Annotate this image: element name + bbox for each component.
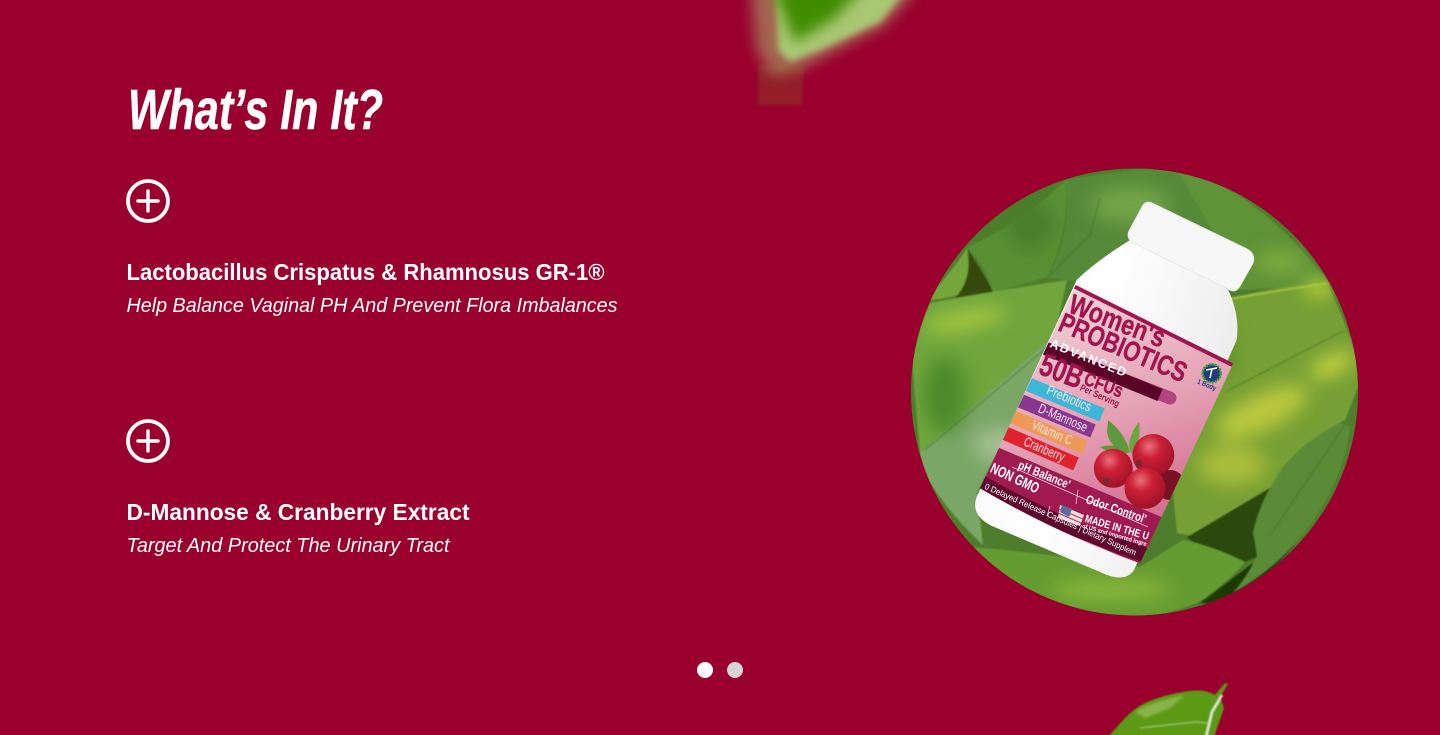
item 2: D-Mannose xyxy=(126,421,470,557)
label: Prebiotics xyxy=(1045,382,1094,415)
decorative leaf: bottom xyxy=(1108,683,1228,735)
lower magenta band xyxy=(980,448,1162,564)
claims: of US and imported ingre xyxy=(1081,524,1148,548)
leaf veins xyxy=(925,198,1345,535)
CFU count: 50B xyxy=(1035,346,1089,396)
item 1 heading: Lactobacillus Crispatus & Rhamnosus GR-1® xyxy=(126,259,605,285)
bottle body xyxy=(975,230,1237,578)
item 2 heading: D-Mannose & Cranberry Extract xyxy=(126,499,470,525)
claims: MADE IN THE U xyxy=(1083,513,1150,543)
advanced bar: ADVANCED xyxy=(1048,336,1128,380)
bottle cap xyxy=(1128,202,1254,291)
label: D-Mannose xyxy=(1036,401,1090,435)
icon: plus circle 1 xyxy=(128,181,168,221)
brand lines: PROBIOTICS xyxy=(1054,307,1192,388)
carousel dots xyxy=(697,662,743,678)
CFU count xyxy=(1039,353,1122,408)
logo: 1 Body xyxy=(1196,364,1221,393)
claims: Odor Control' xyxy=(1084,492,1148,526)
logo: 1 Body: 1 Body xyxy=(1196,379,1217,393)
leaves background xyxy=(905,165,1365,621)
bottle xyxy=(975,202,1254,578)
label: Cranberry xyxy=(1022,434,1067,465)
brand lines xyxy=(1058,294,1188,381)
item 2 description: Target And Protect The Urinary Tract xyxy=(126,535,451,557)
cranberries xyxy=(1094,420,1185,509)
brand lines: Women's xyxy=(1065,288,1170,353)
flag xyxy=(1058,505,1084,526)
advanced bar xyxy=(1040,336,1170,398)
label: Vitamin C xyxy=(1030,417,1075,448)
item 1: Lactobacillus xyxy=(126,181,618,317)
top band xyxy=(1075,284,1234,363)
bottom dark band xyxy=(980,482,1148,556)
claims: pH Balance' xyxy=(1016,458,1072,492)
ingredient pills xyxy=(1000,383,1102,464)
decorative blurred leaf: top xyxy=(750,0,925,105)
title: What’s In It? xyxy=(128,78,383,142)
CFU count: Per Serving xyxy=(1078,383,1121,410)
label background xyxy=(980,285,1233,563)
product photo circle xyxy=(905,165,1365,621)
label xyxy=(975,284,1234,565)
claims: 0 Delayed Release Capsules | Dietary Supplem xyxy=(983,481,1138,557)
dividers xyxy=(1012,467,1148,527)
icon: plus circle 2 xyxy=(128,421,168,461)
claims: NON GMO xyxy=(988,460,1042,497)
CFU count: CFUs xyxy=(1081,369,1126,402)
cranberry leaves xyxy=(1107,420,1130,452)
leaf highlights xyxy=(922,187,1358,600)
item 1 description: Help Balance Vaginal PH And Prevent Flora Imbalances xyxy=(126,295,618,317)
